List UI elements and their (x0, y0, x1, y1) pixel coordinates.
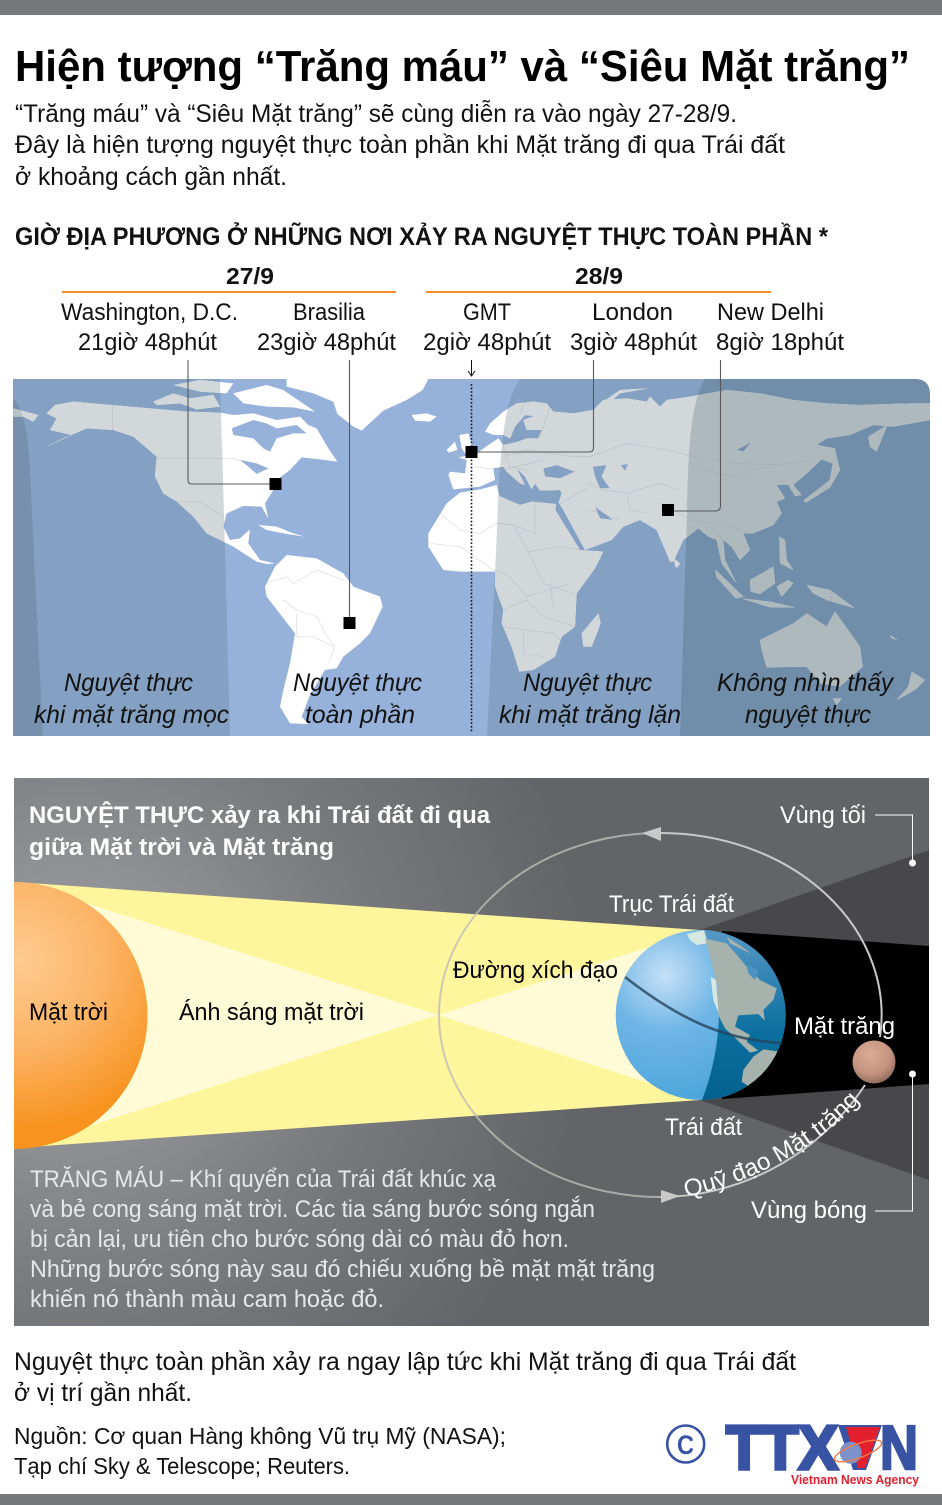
penumbra (700, 850, 929, 1180)
panel: eclipse diagram (14, 778, 929, 1326)
map zone labels: Nguyệt thực (64, 669, 193, 697)
date headers: 28/9 (575, 263, 623, 289)
diagram labels (29, 891, 895, 1141)
logo: TTXVN: TTX (726, 1414, 838, 1483)
blood moon explanation: và bẻ cong sáng mặt trời. Các tia sáng bước sóng ngắn (30, 1196, 595, 1223)
blood moon explanation (30, 1166, 655, 1313)
city times: New Delhi (717, 299, 824, 326)
source: Nguồn: Cơ quan Hàng không Vũ trụ Mỹ (NASA); (14, 1423, 506, 1449)
top bar (0, 0, 942, 15)
leader lines (188, 360, 720, 618)
city times: 8giờ 18phút (716, 329, 844, 356)
diagram labels: Mặt trăng (794, 1013, 895, 1040)
city markers (270, 446, 674, 629)
city times: London (592, 299, 673, 326)
title: Hiện tượng “Trăng máu” và “Siêu Mặt trăng” (15, 42, 910, 91)
label: umbra region (780, 802, 916, 866)
closing note (14, 1348, 796, 1407)
intro text: Đây là hiện tượng nguyệt thực toàn phần khi Mặt trăng đi qua Trái đất (15, 131, 785, 159)
panel heading: giữa Mặt trời và Mặt trăng (29, 834, 334, 861)
intro text (15, 99, 785, 191)
blood moon explanation: Những bước sóng này sau đó chiếu xuống bề mặt mặt trăng (30, 1256, 655, 1283)
GMT meridian and arrow (468, 360, 475, 733)
city times (61, 299, 844, 356)
city times: Washington, D.C. (61, 299, 238, 326)
map zone labels: toàn phần (305, 701, 415, 729)
orbit label: Quỹ đạo Mặt trăng (684, 1093, 861, 1198)
city times: 21giờ 48phút (78, 329, 217, 356)
logo: TTXVN: Vietnam News Agency (791, 1472, 920, 1487)
map zone labels (34, 669, 894, 729)
logo: TTXVN: N (880, 1414, 918, 1483)
map zone labels: Nguyệt thực (523, 669, 652, 697)
map zone labels: Không nhìn thấy (717, 669, 894, 697)
city times: GMT (463, 299, 511, 326)
diagram labels: Đường xích đạo (453, 957, 618, 984)
intro text: “Trăng máu” và “Siêu Mặt trăng” sẽ cùng diễn ra vào ngày 27-28/9. (15, 99, 737, 128)
map zone labels: khi mặt trăng lặn (499, 701, 681, 729)
copyright icon: C (677, 1430, 694, 1460)
bottom bar (0, 1494, 942, 1505)
moon orbit (439, 833, 882, 1197)
panel heading: NGUYỆT THỰC xảy ra khi Trái đất đi qua (29, 801, 490, 829)
closing note: Nguyệt thực toàn phần xảy ra ngay lập tức khi Mặt trăng đi qua Trái đất (14, 1348, 796, 1376)
map zone labels: Nguyệt thực (293, 669, 422, 697)
sunlight rays (15, 882, 700, 1148)
city times: 2giờ 48phút (423, 329, 551, 356)
label: umbra region: Vùng tối (780, 802, 866, 829)
diagram labels: Mặt trời (29, 999, 108, 1026)
intro text: ở khoảng cách gần nhất. (15, 163, 287, 191)
sunlight cones (70, 898, 655, 1132)
city times: Brasilia (293, 299, 366, 326)
sun (14, 882, 148, 1149)
label: penumbra region: Vùng bóng (751, 1197, 867, 1224)
blood moon explanation: khiến nó thành màu cam hoặc đỏ. (30, 1286, 384, 1313)
map zone labels: nguyệt thực (745, 701, 871, 729)
date headers: 27/9 (226, 263, 274, 289)
world map (13, 379, 930, 736)
diagram labels: Trục Trái đất (609, 891, 734, 918)
orbit arrows (642, 827, 680, 1203)
date headers (62, 263, 771, 293)
panel heading (29, 801, 490, 861)
blood moon explanation: TRĂNG MÁU – Khí quyển của Trái đất khúc xạ (30, 1166, 497, 1193)
city times: 23giờ 48phút (257, 329, 396, 356)
umbra (722, 931, 929, 1099)
closing note: ở vị trí gần nhất. (14, 1379, 192, 1407)
source (14, 1423, 506, 1479)
label: penumbra region (751, 1070, 916, 1224)
logo: TTXVN (726, 1414, 920, 1487)
earth (616, 930, 786, 1100)
copyright icon (667, 1426, 704, 1462)
section heading: GIỜ ĐỊA PHƯƠNG Ở NHỮNG NƠI XẢY RA NGUYỆT THỰC TOÀN PHẦN * (15, 221, 828, 251)
blood moon explanation: bị cản lại, ưu tiên cho bước sóng dài có màu đỏ hơn. (30, 1226, 569, 1253)
moon (852, 1040, 896, 1084)
source: Tạp chí Sky & Telescope; Reuters. (14, 1453, 350, 1479)
diagram labels: Ánh sáng mặt trời (179, 999, 364, 1026)
city times: 3giờ 48phút (570, 329, 697, 356)
diagram labels: Trái đất (665, 1114, 742, 1141)
map zone labels: khi mặt trăng mọc (34, 701, 229, 729)
